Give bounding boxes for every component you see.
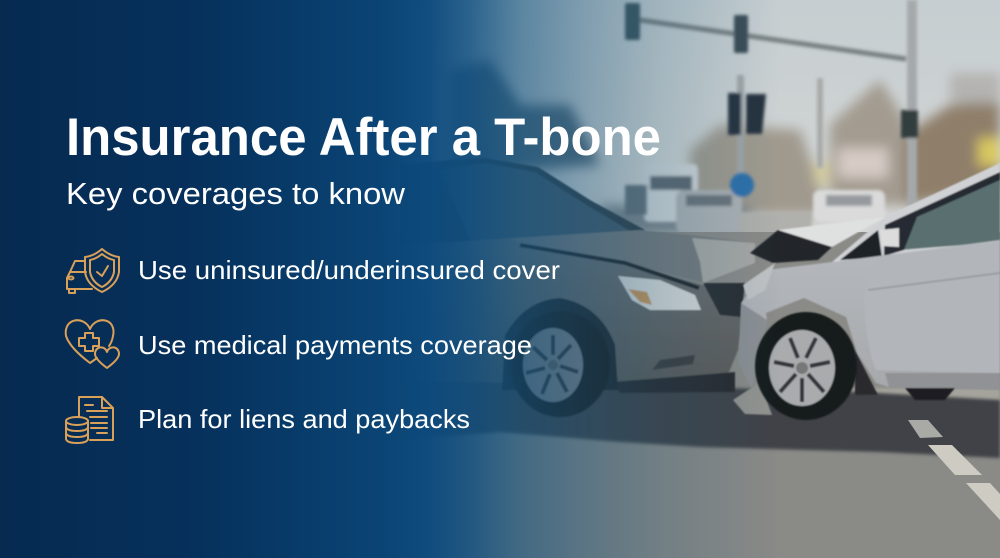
distant vehicles and road sign [625,164,885,242]
icon: car with shield [67,249,119,293]
title: Insurance After a T-bone [66,108,661,167]
illustration: grey sedan on the left [400,158,755,393]
traffic light gantry [625,0,918,205]
subtitle: Key coverages to know [66,176,406,211]
background: blurred street scene [0,0,1000,242]
illustration: silver car on the right [739,163,1000,400]
icon: coins with document [66,397,113,443]
illustration: silver car front wheel [755,312,857,420]
item text: liens and paybacks: Plan for liens and paybacks [138,404,470,434]
icon: heart with medical cross [66,320,119,368]
illustration: grey sedan front wheel [510,311,610,417]
road surface [0,232,1000,558]
item text: uninsured cover: Use uninsured/underinsured cover [138,255,560,285]
item text: medical payments coverage: Use medical payments coverage [138,330,532,360]
